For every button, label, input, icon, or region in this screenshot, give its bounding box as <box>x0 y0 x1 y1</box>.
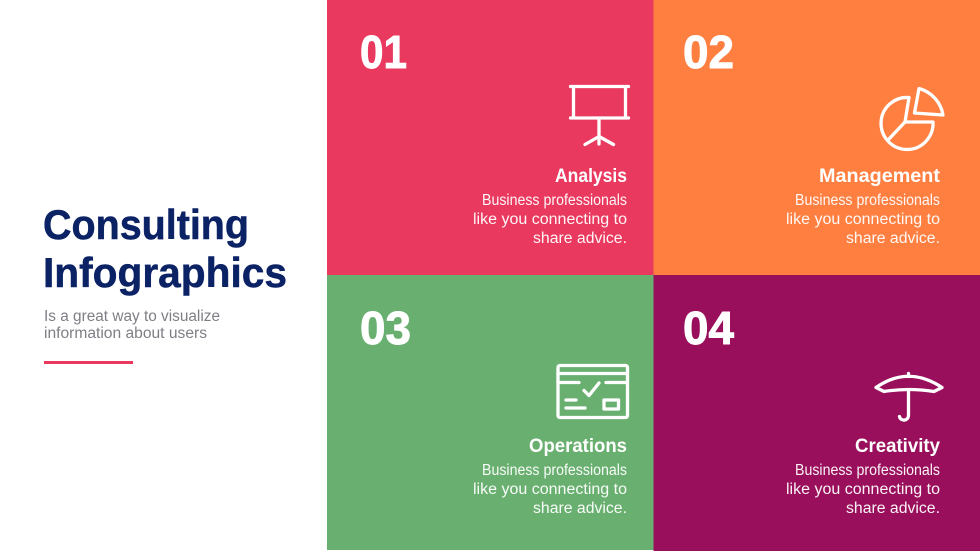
number 03: 03 <box>360 302 411 354</box>
heading: Creativity: Creativity <box>855 436 940 457</box>
body text: Business professionals <box>482 192 627 209</box>
icon: card with checkmark <box>558 366 628 418</box>
heading: Analysis: Analysis <box>555 166 627 187</box>
subtitle: information about users <box>44 325 207 342</box>
number 02: 02 <box>683 26 734 78</box>
body text: like you connecting to <box>786 481 940 498</box>
heading: Management: Management <box>819 166 941 187</box>
body text: Business professionals <box>795 462 940 479</box>
subtitle: Is a great way to visualize <box>44 308 220 325</box>
body text: like you connecting to <box>473 481 627 498</box>
number 01: 01 <box>360 26 407 78</box>
number 04: 04 <box>683 302 734 354</box>
title: Consulting <box>43 201 249 248</box>
body text <box>786 462 940 517</box>
body text: Business professionals <box>795 192 940 209</box>
body text: share advice. <box>846 500 940 517</box>
panel: 04 Creativity <box>654 275 980 551</box>
icon: umbrella <box>876 374 942 420</box>
heading: Operations: Operations <box>529 436 627 457</box>
icon: pie chart <box>881 88 943 149</box>
accent underline <box>44 361 133 364</box>
body text: Business professionals <box>482 462 627 479</box>
subtitle <box>44 308 220 342</box>
title: Infographics <box>43 249 287 296</box>
title <box>43 201 287 296</box>
body text: share advice. <box>533 500 627 517</box>
body text: share advice. <box>533 230 627 247</box>
icon: presentation board <box>570 86 628 144</box>
body text: like you connecting to <box>786 211 940 228</box>
panel: 03 Operations <box>327 275 654 550</box>
body text <box>473 192 627 247</box>
panel: 02 Management <box>654 0 980 275</box>
body text <box>786 192 940 247</box>
panel: 01 Analysis <box>327 0 654 275</box>
body text <box>473 462 627 517</box>
body text: share advice. <box>846 230 940 247</box>
body text: like you connecting to <box>473 211 627 228</box>
